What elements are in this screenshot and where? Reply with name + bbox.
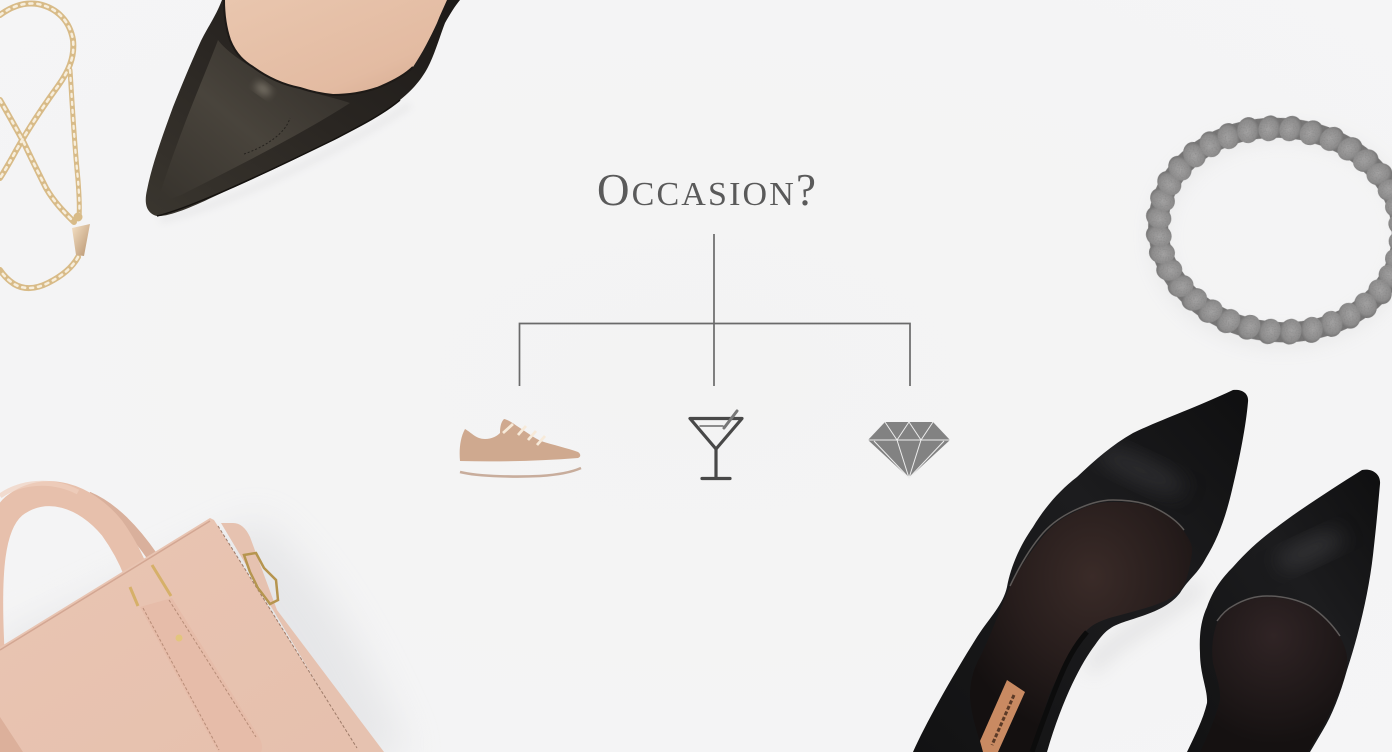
- photo: gold chain necklace: [0, 3, 90, 288]
- photo: blush leather handbag: [0, 483, 410, 752]
- photo: black pointed shoe, rear: [1187, 470, 1380, 752]
- photo: grey braided bracelet: [1130, 98, 1392, 362]
- icon: sneaker: [460, 419, 581, 477]
- heading: OCCASION?: [597, 165, 818, 215]
- photo: black pointed shoe, front: [913, 390, 1248, 752]
- photo: patent pointed shoe, top left: [146, 0, 460, 220]
- icon: martini glass: [690, 411, 742, 478]
- icon: diamond: [868, 422, 950, 478]
- connector lines: [520, 234, 910, 386]
